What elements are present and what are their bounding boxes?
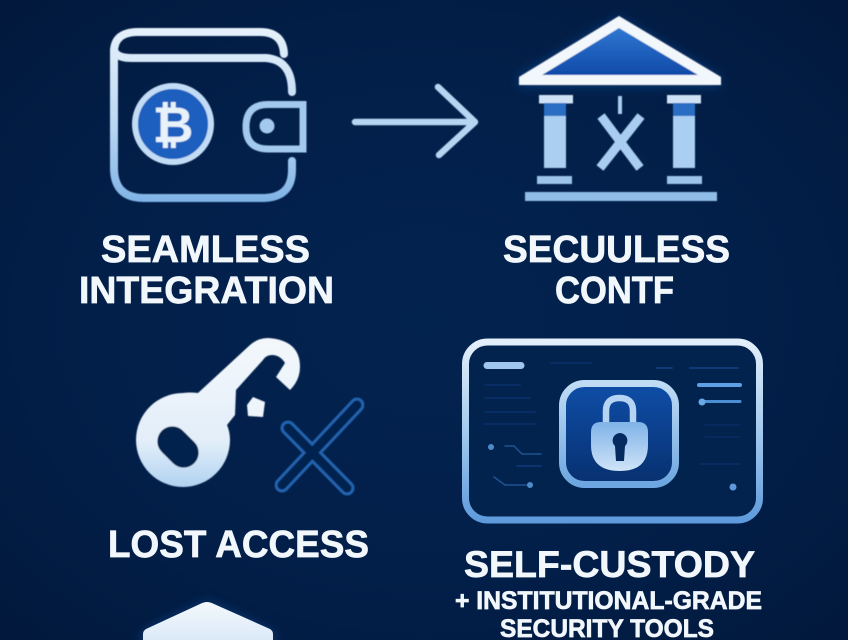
key hole [151,420,205,474]
icon: bitcoin coin: ₿ [153,96,193,154]
dashboard details [485,363,740,490]
icon: bitcoin coin [135,86,211,162]
icon: partial hexagon [143,602,273,640]
icon: x outline [282,405,357,488]
heading: seamless integration [79,229,334,312]
right column [667,95,702,184]
icon: padlock [591,398,648,471]
heading: secuuless contf [503,229,730,312]
text: institutional-grade security tools: + INSTITUTIONAL-GRADE [455,587,762,615]
heading: self-custody: SELF-CUSTODY [464,544,755,585]
bank floor [525,192,717,201]
heading: secuuless contf: CONTF [555,270,674,312]
icon: broken key [136,338,300,487]
heading: seamless integration: SEAMLESS [101,229,310,271]
broken key fragment [247,397,265,417]
text: institutional-grade security tools [455,587,762,640]
heading: secuuless contf: SECUULESS [503,229,730,271]
x mark with tick [600,96,641,168]
heading: lost access: LOST ACCESS [108,524,369,566]
bank roof [519,16,721,85]
icon: bank with x [519,16,721,201]
icon: bitcoin wallet [114,32,303,198]
heading: seamless integration: INTEGRATION [79,270,334,312]
left column [537,95,573,184]
panel: self-custody dashboard [466,342,760,520]
lock tile [562,384,676,484]
arrow [355,87,475,155]
icon: wallet clasp [246,104,303,149]
